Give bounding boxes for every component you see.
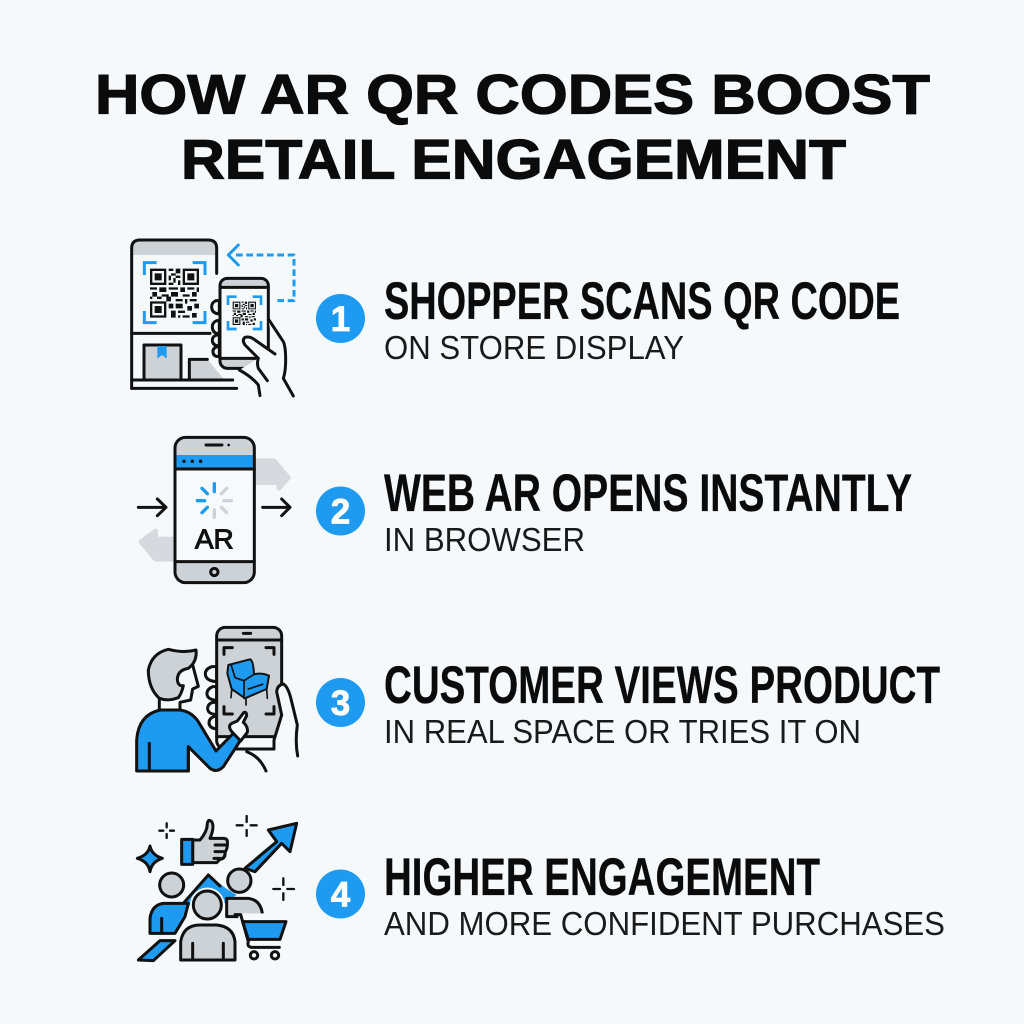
icon: shopper scanning QR code on store display [132, 240, 294, 396]
loading spinner [197, 484, 231, 517]
step number 4 [316, 870, 365, 918]
step 4 text: HIGHER ENGAGEMENT [384, 848, 820, 907]
icon: engagement growth with people, cart and thumbs up [137, 816, 297, 961]
step 3 row [137, 627, 940, 771]
chair [231, 689, 267, 705]
step number 1 [316, 294, 365, 343]
sparkles [159, 816, 294, 900]
people [227, 898, 263, 917]
arrows [138, 499, 166, 516]
far hand [274, 684, 298, 756]
step 4 text: AND MORE CONFIDENT PURCHASES [384, 906, 945, 943]
step number 2: 2 [331, 492, 350, 532]
person [159, 665, 198, 712]
icon: customer viewing chair in AR on phone [137, 627, 298, 771]
step 3 text [384, 656, 940, 751]
step 2 text [384, 464, 912, 559]
hand [239, 320, 293, 396]
step 1 text [384, 272, 900, 367]
title: RETAIL ENGAGEMENT [181, 128, 846, 190]
shopping cart [238, 913, 288, 960]
step 4 row [137, 816, 945, 961]
title [95, 62, 930, 190]
step 2 text: IN BROWSER [384, 522, 585, 559]
step 4 text [384, 848, 945, 943]
thumbs up [193, 820, 227, 863]
step number 3 [316, 678, 365, 727]
AR label: AR [195, 523, 234, 554]
title: HOW AR QR CODES BOOST [95, 62, 930, 126]
step 2 row [138, 437, 912, 583]
growth arrow [138, 941, 175, 961]
step 3 text: IN REAL SPACE OR TRIES IT ON [384, 714, 861, 751]
icon: phone opening web AR [138, 437, 290, 583]
step number 2 [316, 486, 365, 536]
step number 3: 3 [331, 684, 350, 723]
step 1 row [132, 240, 900, 396]
step number 1: 1 [331, 300, 350, 339]
step number 4: 4 [331, 876, 351, 914]
step 1 text: ON STORE DISPLAY [384, 330, 684, 367]
